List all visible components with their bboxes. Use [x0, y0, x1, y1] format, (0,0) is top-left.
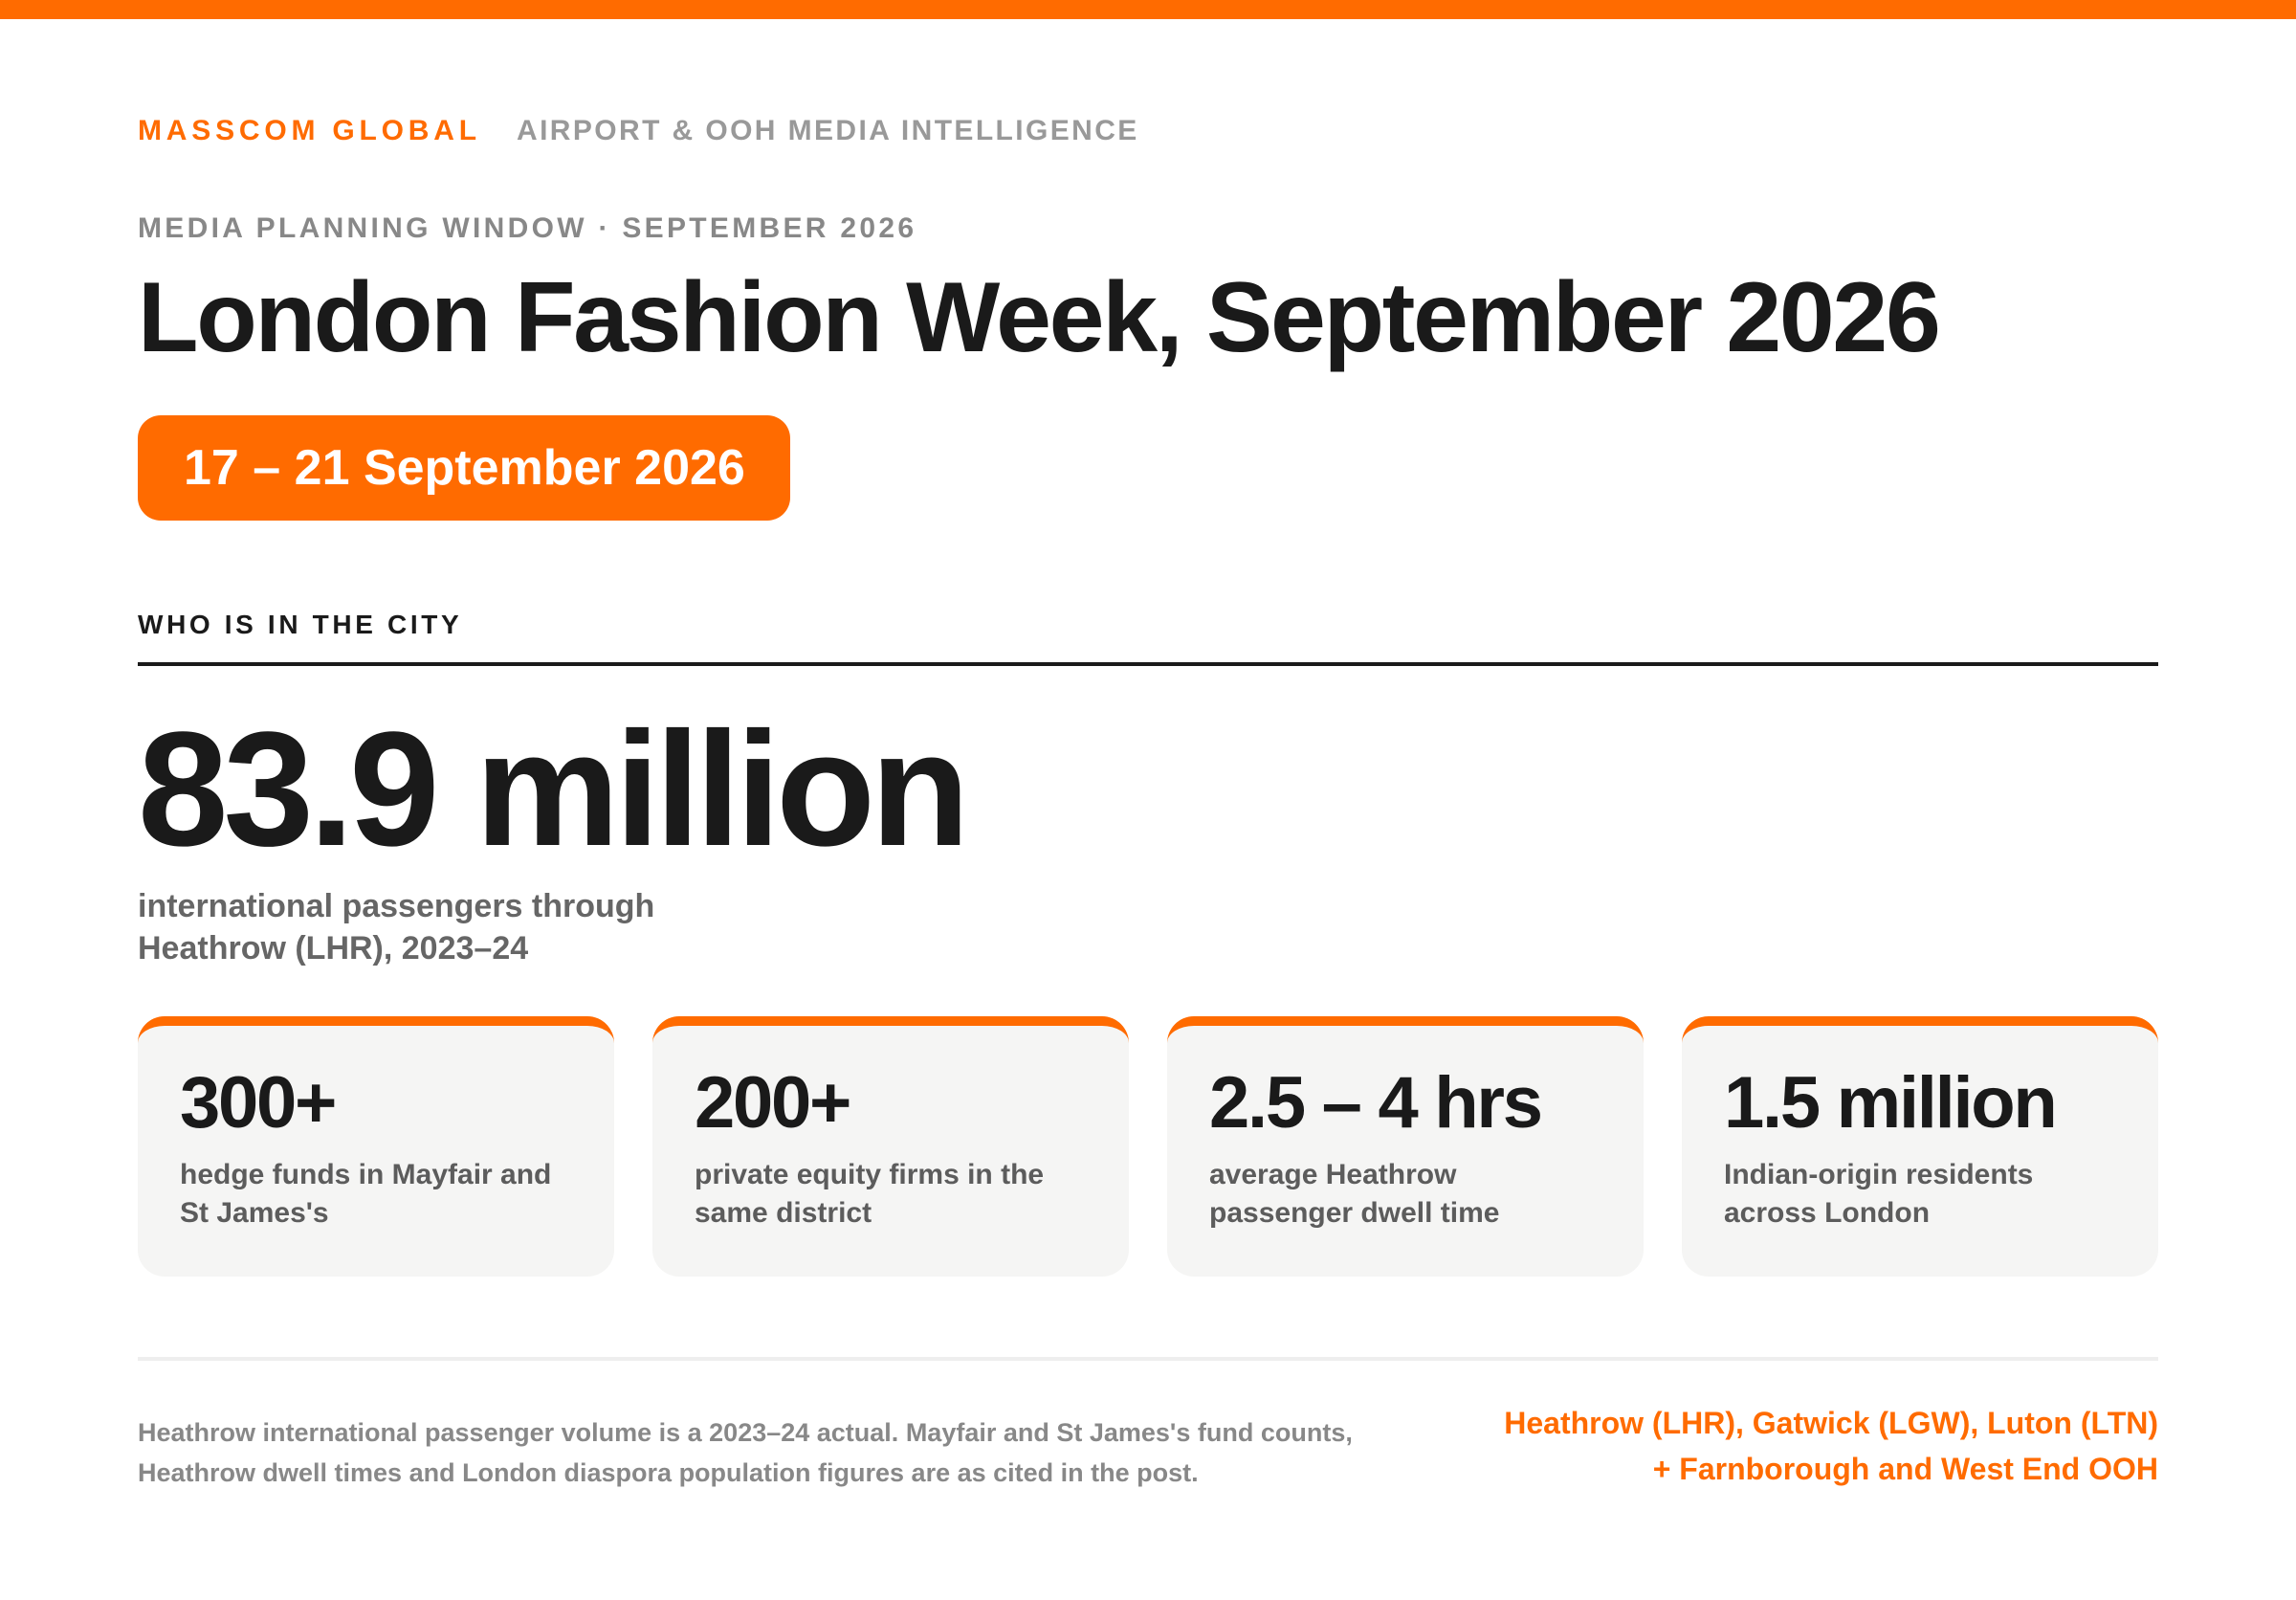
airports callout — [1504, 1406, 2158, 1486]
card: diaspora — [1682, 1016, 2158, 1277]
card label: St James's — [180, 1197, 329, 1229]
hero statistic: 83.9 million — [138, 699, 965, 880]
footnote: Heathrow dwell times and London diaspora population figures are as cited in the post. — [138, 1458, 1199, 1487]
card label — [695, 1159, 1044, 1229]
card: hedge funds — [138, 1016, 614, 1277]
hero caption: Heathrow (LHR), 2023–24 — [138, 930, 528, 967]
card label: Indian-origin residents — [1724, 1159, 2033, 1190]
date text: 17 – 21 September 2026 — [184, 440, 745, 496]
footnote: Heathrow international passenger volume is a 2023–24 actual. Mayfair and St James's fund counts, — [138, 1418, 1353, 1447]
card label: across London — [1724, 1197, 1930, 1229]
section rule — [138, 662, 2158, 666]
brand descriptor: AIRPORT & OOH MEDIA INTELLIGENCE — [517, 115, 1139, 146]
card: dwell time — [1167, 1016, 1644, 1277]
card number: 300+ — [180, 1062, 335, 1144]
brand name: MASSCOM GLOBAL — [138, 115, 481, 146]
card number: 200+ — [695, 1062, 850, 1144]
date badge — [138, 415, 790, 521]
card label — [1724, 1159, 2033, 1229]
eyebrow: MEDIA PLANNING WINDOW · SEPTEMBER 2026 — [138, 212, 916, 244]
top accent bar — [0, 0, 2296, 19]
footnote — [138, 1418, 1353, 1487]
card label: private equity firms in the — [695, 1159, 1044, 1190]
airports callout: + Farnborough and West End OOH — [1653, 1452, 2158, 1486]
hero caption: international passengers through — [138, 888, 654, 924]
card label — [1209, 1159, 1499, 1229]
footer rule — [138, 1357, 2158, 1361]
card label — [180, 1159, 551, 1229]
title: London Fashion Week, September 2026 — [138, 262, 1939, 373]
card number: 1.5 million — [1724, 1062, 2056, 1144]
card label: average Heathrow — [1209, 1159, 1456, 1190]
card label: hedge funds in Mayfair and — [180, 1159, 551, 1190]
hero caption — [138, 888, 654, 967]
card: private equity — [652, 1016, 1129, 1277]
section heading: WHO IS IN THE CITY — [138, 610, 462, 639]
card label: same district — [695, 1197, 872, 1229]
card number: 2.5 – 4 hrs — [1209, 1062, 1541, 1144]
card label: passenger dwell time — [1209, 1197, 1499, 1229]
airports callout: Heathrow (LHR), Gatwick (LGW), Luton (LTN) — [1504, 1406, 2158, 1440]
